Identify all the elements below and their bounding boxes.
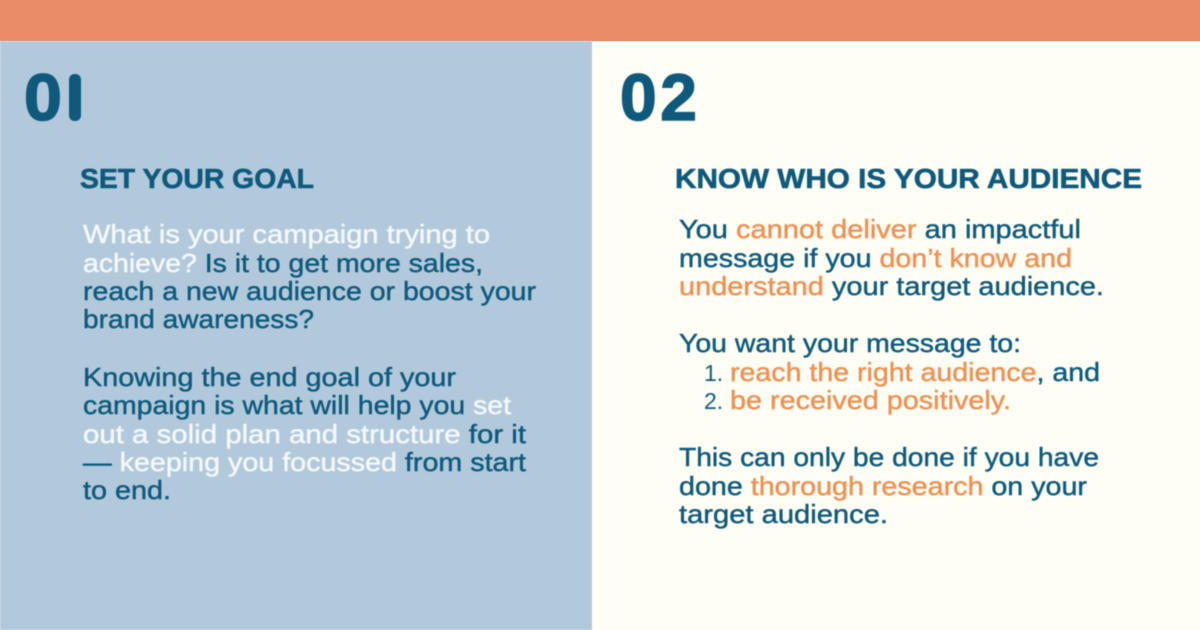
- panel: 01 set your goal: [0, 41, 592, 630]
- text block: goal paragraph one: reach a new audience or boost your: [83, 276, 536, 306]
- text block: audience intro: [679, 214, 1104, 301]
- text block: audience intro: You cannot deliver an impactful: [679, 214, 1081, 244]
- text block: goal paragraph one: What is your campaign trying to: [83, 219, 490, 249]
- text block: goal paragraph one: achieve? Is it to get more sales,: [83, 248, 483, 278]
- text block: audience intro: understand your target audience.: [679, 271, 1104, 301]
- top orange banner: [0, 0, 1200, 41]
- text block: message list: reach the right audience , and: [730, 357, 1100, 387]
- text block: message list: 2.: [704, 388, 723, 414]
- text block: message list: [679, 328, 1100, 415]
- text block: audience conclusion: This can only be done if you have: [679, 442, 1099, 472]
- text block: goal paragraph one: [83, 219, 536, 334]
- panel: 02 know your audience: [620, 60, 1142, 529]
- text block: message list: be received positively.: [730, 385, 1011, 415]
- text block: audience conclusion: target audience.: [679, 499, 888, 529]
- text block: message list: You want your message to:: [679, 328, 1021, 358]
- number 01: 0: [24, 60, 62, 134]
- text block: audience intro: message if you don’t know and: [679, 243, 1072, 273]
- text block: goal paragraph two: to end.: [83, 475, 171, 505]
- text block: goal paragraph two: — keeping you focussed from start: [83, 447, 527, 477]
- text block: goal paragraph two: campaign is what will help you set: [83, 390, 512, 420]
- text block: goal paragraph two: out a solid plan and structure for it: [83, 419, 527, 449]
- number 01: [24, 60, 81, 134]
- text block: message list: 1.: [704, 360, 723, 386]
- text block: goal paragraph two: [83, 362, 527, 505]
- text block: goal paragraph one: brand awareness?: [83, 304, 314, 334]
- text block: audience conclusion: [679, 442, 1099, 529]
- text block: goal paragraph two: Knowing the end goal of your: [83, 362, 456, 392]
- heading: set your goal: SET YOUR GOAL: [80, 163, 314, 194]
- heading: know who is your audience: KNOW WHO IS YOUR AUDIENCE: [675, 163, 1142, 194]
- text block: audience conclusion: done thorough research on your: [679, 471, 1087, 501]
- number 02: 02: [620, 60, 697, 134]
